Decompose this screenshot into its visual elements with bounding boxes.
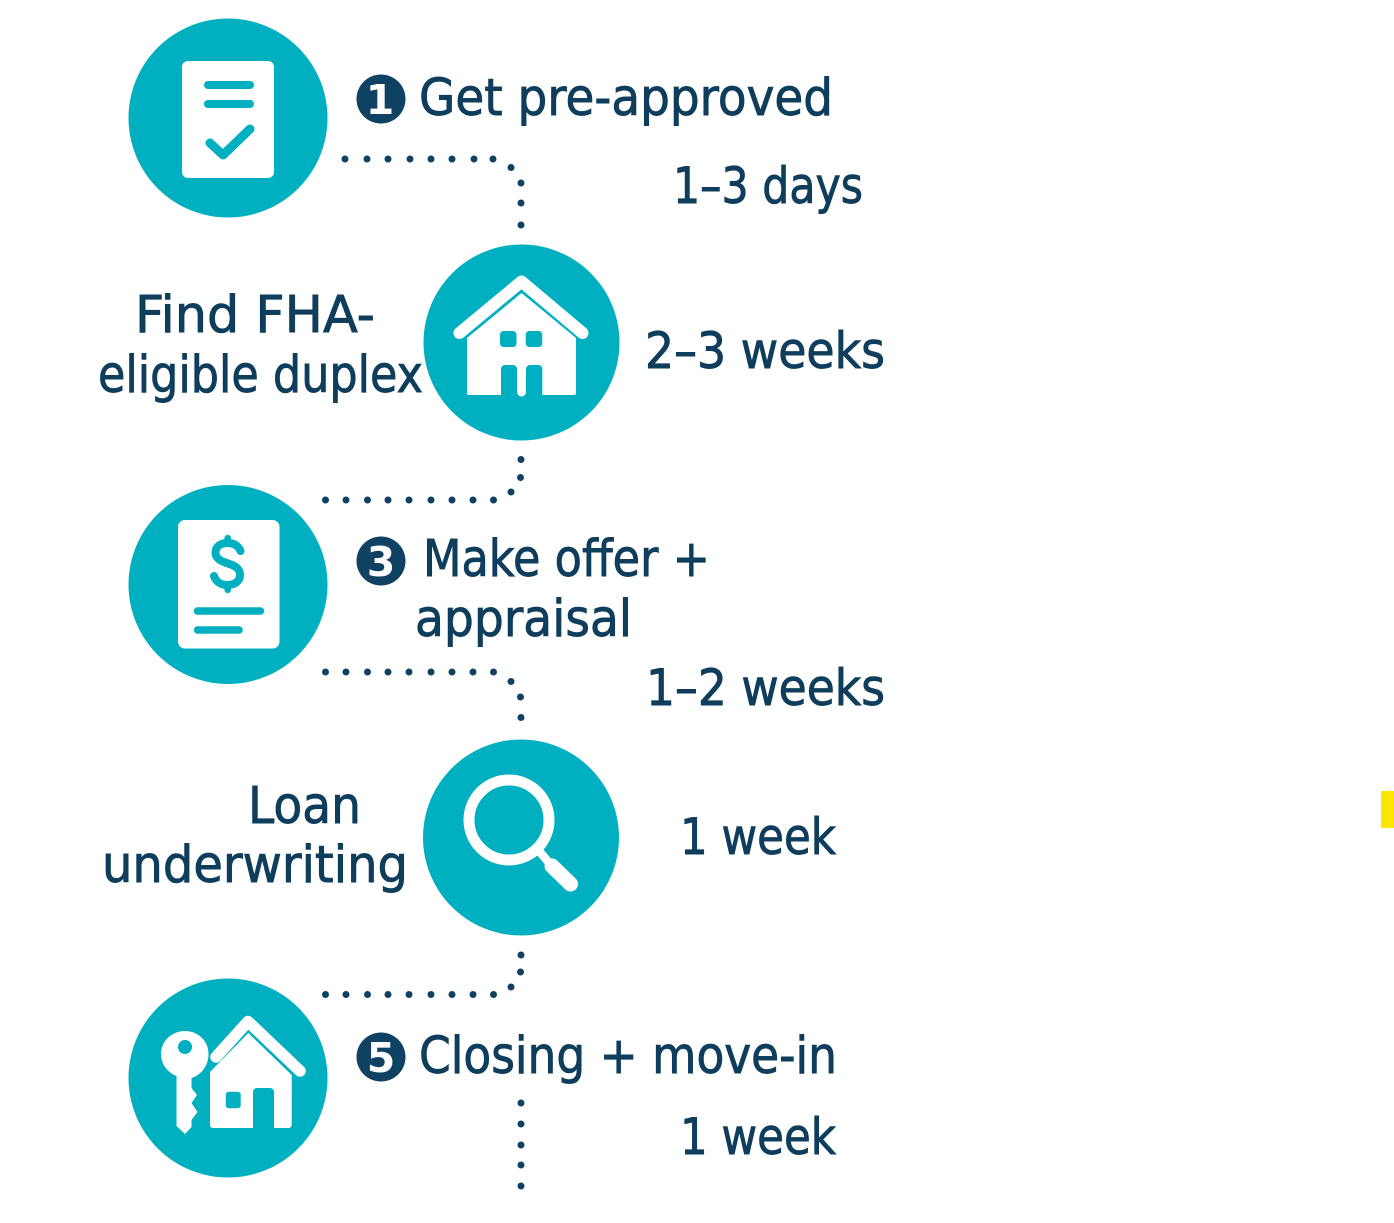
duration: 1-2 weeks: 1–2 weeks (646, 659, 885, 717)
heading: loan underwriting: underwriting (102, 836, 408, 895)
icon: checklist document (128, 18, 328, 218)
step 2: find FHA-eligible duplex (98, 244, 620, 440)
heading: loan underwriting: Loan (248, 777, 361, 836)
connector: step 3 to step 4 (322, 668, 524, 721)
heading: find FHA-eligible duplex: Find FHA- (135, 286, 375, 345)
heading: find FHA-eligible duplex: eligible duplex (98, 346, 423, 405)
step 4: loan underwriting (102, 740, 619, 936)
step 3: make offer and appraisal (128, 485, 710, 684)
step 5: closing and move-in (128, 978, 837, 1178)
duration: 1 week: 1 week (680, 808, 836, 866)
badge: number 3: 3 (367, 538, 395, 586)
connector: step 4 to step 5 (322, 952, 524, 998)
heading: find FHA-eligible duplex (98, 286, 423, 405)
heading: closing + move-in: Closing + move-in (419, 1027, 837, 1086)
icon: magnifying glass (423, 740, 619, 936)
connector: step 2 to step 3 (322, 456, 524, 504)
badge: number 1: 1 (366, 76, 394, 124)
duration: 1 week: 1 week (680, 1108, 836, 1166)
heading: make offer + appraisal: Make offer + (423, 530, 710, 589)
heading: make offer + appraisal: appraisal (415, 590, 632, 649)
heading: loan underwriting (102, 777, 408, 895)
connector: step 1 to step 2 (342, 156, 524, 228)
badge: number 3 (356, 536, 406, 586)
connector: trailing dots after step 5 (518, 1100, 524, 1190)
heading: get pre-approved: Get pre-approved (419, 69, 833, 128)
icon: key and house (128, 978, 328, 1178)
badge: number 5: 5 (367, 1034, 395, 1082)
yellow edge marker (1381, 791, 1394, 828)
duration: 2-3 weeks: 2–3 weeks (645, 322, 885, 380)
badge: number 5 (356, 1032, 406, 1082)
badge: number 1 (356, 74, 406, 124)
duration: 1-3 days: 1–3 days (673, 157, 863, 215)
heading: make offer + appraisal (415, 530, 710, 649)
icon: duplex house (424, 244, 620, 440)
icon: priced offer document (128, 485, 328, 684)
step 1: get pre-approved (128, 18, 833, 218)
